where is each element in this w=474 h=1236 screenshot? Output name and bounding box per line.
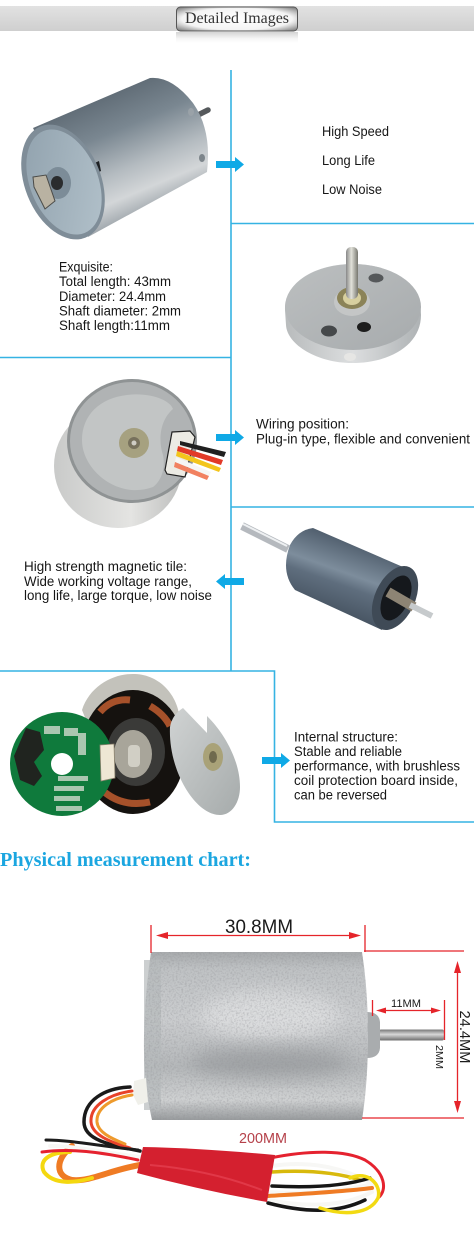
- arrow: left, magnetic tile: [216, 574, 244, 589]
- photo: magnetic tile rotor: [242, 524, 432, 637]
- text: internal structure: Stable and reliable: [294, 744, 402, 759]
- text: internal structure: coil protection board inside,: [294, 773, 458, 788]
- arrow: right, internal structure: [262, 753, 290, 768]
- text: exquisite specifications: [59, 260, 181, 333]
- text: internal structure: Internal structure:: [294, 730, 398, 744]
- photo: motor rear with plug-in wiring: [54, 379, 226, 528]
- photo: brushless motor angled view: [5, 78, 208, 252]
- blue panel divider lines: [0, 70, 474, 822]
- text: high strength magnetic tile: High strength magnetic tile:: [24, 559, 187, 574]
- dimension: 11MM shaft length: 11MM: [391, 998, 421, 1010]
- text: wiring position: [256, 416, 470, 446]
- text: exquisite specifications: Diameter: 24.4mm: [59, 289, 166, 304]
- text: high strength magnetic tile: [24, 559, 212, 603]
- heading: physical measurement chart: Physical measurement chart:: [0, 849, 251, 871]
- photo: motor side view with wires: [42, 952, 444, 1213]
- arrow: right, first row: [216, 157, 244, 172]
- text: exquisite specifications: Shaft diameter: 2mm: [59, 304, 181, 318]
- dimension: 30.8MM length: 30.8MM: [225, 917, 293, 938]
- photo: motor end plate with shaft: [285, 247, 421, 363]
- text: internal structure: performance, with brushless: [294, 758, 460, 774]
- header: Detailed Images: [0, 6, 474, 43]
- text: high strength magnetic tile: long life, large torque, low noise: [24, 588, 212, 603]
- text: wiring position: Wiring position:: [256, 416, 349, 432]
- arrow: right, wiring: [216, 430, 244, 445]
- dimension: 30.8MM length: [151, 917, 365, 953]
- dimension: 200MM wire length: 200MM: [239, 1131, 287, 1147]
- text: high speed, long life, low noise: High Speed: [322, 124, 389, 139]
- text: exquisite specifications: Total length: 43mm: [59, 274, 171, 289]
- dimension: 11MM shaft length: [372, 998, 444, 1040]
- text: high speed, long life, low noise: [322, 124, 389, 197]
- text: high strength magnetic tile: Wide working voltage range,: [24, 574, 192, 589]
- text: exquisite specifications: Shaft length:11mm: [59, 318, 170, 333]
- dimension: 24.4MM diameter: 24.4MM: [456, 1010, 473, 1064]
- text: exquisite specifications: Exquisite:: [59, 260, 113, 274]
- photo: disassembled motor with circuit board: [10, 674, 240, 816]
- dimension: 24.4MM diameter: [362, 951, 473, 1118]
- text: high speed, long life, low noise: Long Life: [322, 153, 375, 168]
- dimension: 2MM shaft diameter: 2MM: [433, 1045, 444, 1069]
- header: Detailed Images: Detailed Images: [185, 10, 289, 27]
- text: internal structure: [294, 730, 460, 802]
- text: high speed, long life, low noise: Low Noise: [322, 182, 382, 197]
- text: internal structure: can be reversed: [294, 788, 387, 802]
- text: wiring position: Plug-in type, flexible and convenient: [256, 432, 470, 446]
